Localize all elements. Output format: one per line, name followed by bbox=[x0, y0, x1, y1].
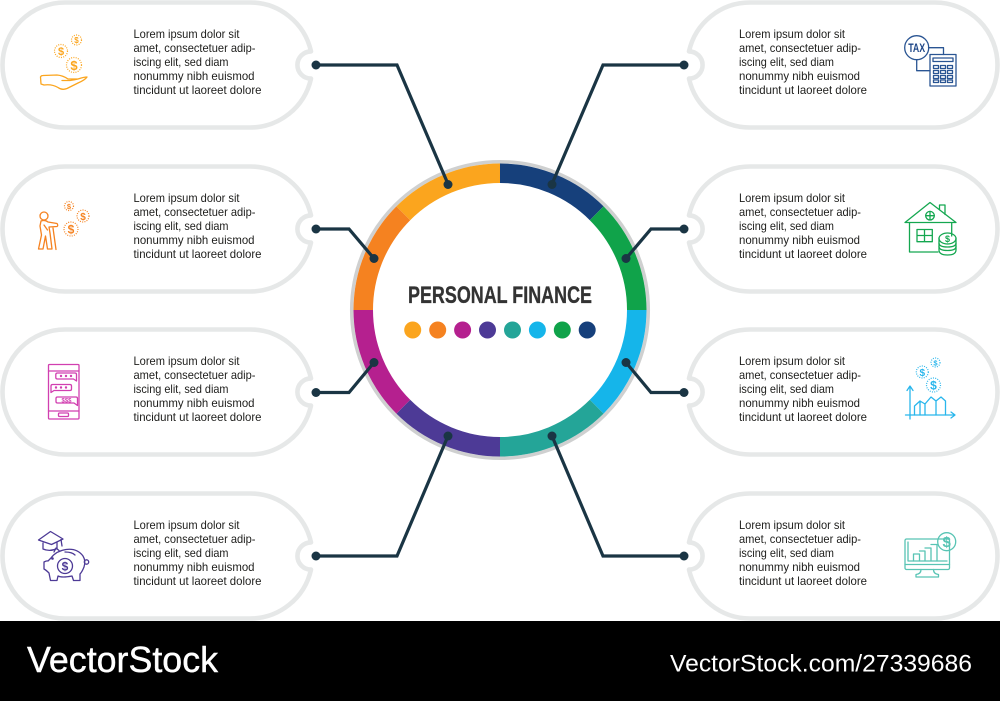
icon: hand with coins bbox=[40, 35, 87, 89]
panel: top left bbox=[3, 2, 311, 128]
icon: monitor with bar chart: $ bbox=[943, 534, 952, 551]
text block: tincidunt ut laoreet dolore bbox=[134, 574, 262, 588]
text block: tincidunt ut laoreet dolore bbox=[739, 247, 867, 261]
icon: phone with chat bubbles bbox=[48, 364, 79, 419]
text block: nonummy nibh euismod bbox=[134, 396, 254, 410]
text block: nonummy nibh euismod bbox=[739, 69, 860, 83]
icon: monitor with bar chart bbox=[905, 533, 956, 577]
icon: phone with chat bubbles: $$$ bbox=[61, 398, 72, 404]
text block bbox=[739, 354, 867, 424]
text block: amet, consectetuer adip- bbox=[134, 41, 256, 55]
panel: top right bbox=[689, 2, 998, 128]
panel: second right bbox=[689, 166, 998, 292]
text block: Lorem ipsum dolor sit bbox=[134, 354, 240, 368]
text block: tincidunt ut laoreet dolore bbox=[134, 247, 262, 261]
text block bbox=[134, 518, 262, 588]
ring segment: green bbox=[597, 213, 637, 310]
text block: nonummy nibh euismod bbox=[739, 396, 860, 410]
panel: second left bbox=[3, 166, 311, 292]
icon: elderly person with coins: $ bbox=[67, 202, 72, 211]
ring segment: navy bbox=[500, 173, 597, 213]
icon: tax calculator bbox=[905, 36, 956, 86]
text block: iscing elit, sed diam bbox=[739, 55, 834, 69]
text block: Lorem ipsum dolor sit bbox=[739, 518, 846, 532]
icon: hand with coins: $ bbox=[58, 46, 64, 58]
text block: Lorem ipsum dolor sit bbox=[739, 191, 846, 205]
connectors bbox=[312, 60, 688, 560]
legend dots bbox=[404, 322, 596, 338]
text block: tincidunt ut laoreet dolore bbox=[739, 83, 867, 97]
icon: piggy bank with graduation cap bbox=[38, 532, 89, 580]
text block: amet, consectetuer adip- bbox=[134, 205, 256, 219]
text block: Lorem ipsum dolor sit bbox=[134, 27, 240, 41]
text block: iscing elit, sed diam bbox=[739, 219, 834, 233]
text block: amet, consectetuer adip- bbox=[134, 532, 256, 546]
text block: iscing elit, sed diam bbox=[134, 546, 228, 560]
text block: Lorem ipsum dolor sit bbox=[134, 518, 240, 532]
text block bbox=[739, 518, 867, 588]
icon: hand with coins: $ bbox=[74, 36, 79, 45]
text block: amet, consectetuer adip- bbox=[739, 205, 861, 219]
text block bbox=[739, 27, 867, 97]
text block bbox=[134, 191, 262, 261]
text block: nonummy nibh euismod bbox=[739, 560, 860, 574]
footer bar bbox=[0, 621, 1000, 701]
icon: house with coins bbox=[905, 202, 956, 255]
icon: growth chart with coins: $ bbox=[920, 368, 926, 379]
text block: Lorem ipsum dolor sit bbox=[739, 27, 846, 41]
center ring bbox=[352, 162, 648, 458]
ring segment: purple bbox=[403, 407, 500, 447]
text block bbox=[134, 27, 262, 97]
footer brand: VectorStock bbox=[27, 639, 219, 680]
panel: bottom right bbox=[689, 494, 998, 618]
ring segment: orange bbox=[363, 213, 403, 310]
text block: iscing elit, sed diam bbox=[134, 55, 228, 69]
text block: iscing elit, sed diam bbox=[739, 546, 834, 560]
ring segment: teal bbox=[500, 407, 597, 447]
text block: nonummy nibh euismod bbox=[134, 560, 254, 574]
panel: bottom left bbox=[3, 494, 311, 618]
text block bbox=[134, 354, 262, 424]
text block: tincidunt ut laoreet dolore bbox=[739, 410, 867, 424]
text block: nonummy nibh euismod bbox=[739, 233, 860, 247]
icon: tax calculator: TAX bbox=[908, 43, 925, 55]
text block: tincidunt ut laoreet dolore bbox=[134, 410, 262, 424]
icon: house with coins: $ bbox=[945, 234, 950, 244]
text block: nonummy nibh euismod bbox=[134, 69, 254, 83]
footer url: VectorStock.com/27339686 bbox=[670, 650, 972, 678]
text block: nonummy nibh euismod bbox=[134, 233, 254, 247]
text block: iscing elit, sed diam bbox=[739, 382, 834, 396]
text block: amet, consectetuer adip- bbox=[739, 41, 861, 55]
text block: Lorem ipsum dolor sit bbox=[739, 354, 846, 368]
text block: iscing elit, sed diam bbox=[134, 219, 228, 233]
icon: growth chart with coins: $ bbox=[933, 358, 938, 368]
icon: piggy bank with graduation cap: $ bbox=[62, 560, 69, 574]
text block: tincidunt ut laoreet dolore bbox=[739, 574, 867, 588]
ring segment: yellow bbox=[403, 173, 500, 213]
text block bbox=[739, 191, 867, 261]
icon: elderly person with coins bbox=[38, 202, 89, 250]
ring segment: light blue bbox=[597, 310, 637, 407]
panel: third right bbox=[689, 330, 998, 454]
text block: amet, consectetuer adip- bbox=[739, 532, 861, 546]
icon: hand with coins: $ bbox=[70, 58, 78, 73]
text block: amet, consectetuer adip- bbox=[134, 368, 256, 382]
text block: iscing elit, sed diam bbox=[134, 382, 228, 396]
panel: third left bbox=[3, 330, 311, 454]
ring segment: magenta bbox=[363, 310, 403, 407]
icon: growth chart with coins: $ bbox=[930, 378, 937, 392]
icon: growth chart with coins bbox=[906, 358, 955, 419]
icon: elderly person with coins: $ bbox=[80, 212, 86, 223]
text block: tincidunt ut laoreet dolore bbox=[134, 83, 262, 97]
text block: amet, consectetuer adip- bbox=[739, 368, 861, 382]
title: PERSONAL FINANCE bbox=[408, 282, 592, 309]
text block: Lorem ipsum dolor sit bbox=[134, 191, 240, 205]
icon: elderly person with coins: $ bbox=[68, 222, 75, 236]
